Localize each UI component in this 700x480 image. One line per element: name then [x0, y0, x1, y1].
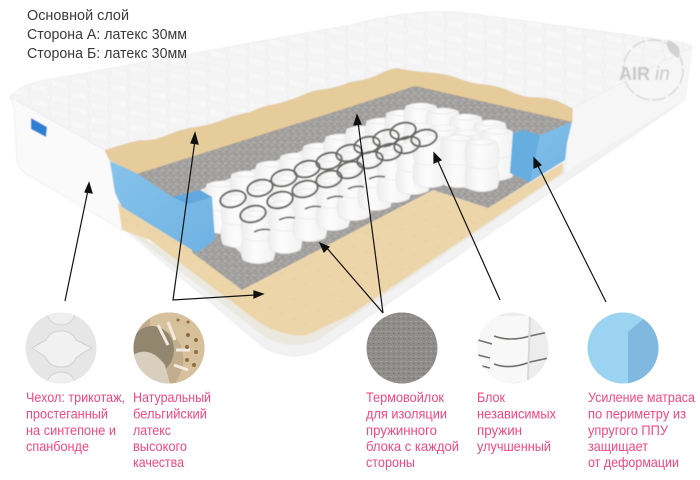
- icon: latex sample: [130, 312, 205, 384]
- grey thermal felt: [137, 86, 572, 290]
- arrow: blue foam: [534, 158, 606, 302]
- icon: quilted fabric: [25, 312, 97, 384]
- arrows: latex: [173, 133, 263, 300]
- quilted top of cover: [10, 12, 692, 150]
- left side of cover: [10, 97, 122, 230]
- text: thermal felt: для изоляции: [366, 406, 447, 422]
- right side of cover: [564, 47, 692, 174]
- text: foam reinforcement: [588, 389, 695, 470]
- watermark logo: in: [655, 64, 670, 85]
- panel: springs: [477, 312, 556, 454]
- text: foam reinforcement: по периметру из: [588, 406, 686, 422]
- quilted lower band: [122, 165, 566, 345]
- text: latex: Натуральный: [133, 389, 211, 405]
- text: foam reinforcement: защищает: [588, 438, 649, 454]
- text: springs: пружин: [477, 422, 522, 438]
- panel: thermal felt: [366, 312, 459, 470]
- arrow: springs: [434, 153, 500, 300]
- pocket springs block: [200, 103, 514, 264]
- text: foam reinforcement: от деформации: [588, 454, 679, 470]
- heading text: Сторона А: латекс 30мм: [27, 27, 187, 43]
- heading text: [27, 8, 187, 62]
- heading text: Основной слой: [27, 8, 129, 24]
- text: thermal felt: стороны: [366, 454, 415, 470]
- watermark logo: [619, 40, 683, 100]
- text: springs: независимых: [477, 406, 556, 422]
- text: springs: улучшенный: [477, 438, 551, 454]
- upper latex wall: [105, 68, 572, 174]
- icon: foam sample: [587, 312, 660, 384]
- mattress bottom cover band: [120, 100, 685, 356]
- text: latex: качества: [133, 454, 184, 470]
- brand tag: [31, 118, 47, 137]
- text: thermal felt: Термовойлок: [366, 389, 445, 405]
- text: cover: на синтепоне и: [26, 422, 116, 438]
- text: springs: [477, 389, 556, 454]
- text: latex: высокого: [133, 438, 187, 454]
- text: springs: Блок: [477, 389, 506, 405]
- arrows: thermal felt: [320, 115, 383, 313]
- mattress illustration: [10, 12, 692, 356]
- bottom latex layer: [118, 163, 563, 336]
- panel: cover: [25, 312, 125, 454]
- panel: latex: [130, 312, 211, 470]
- text: cover: простеганный: [26, 406, 108, 422]
- text: cover: спанбонде: [26, 438, 89, 454]
- icon: spring pockets: [477, 312, 549, 384]
- text: latex: латекс: [133, 422, 171, 438]
- text: latex: бельгийский: [133, 406, 207, 422]
- text: thermal felt: пружинного: [366, 422, 437, 438]
- text: latex: [133, 389, 211, 470]
- text: cover: Чехол: трикотаж,: [26, 389, 125, 405]
- arrow: cover: [65, 183, 92, 301]
- blue foam right: [510, 122, 572, 182]
- spring coils: [218, 120, 439, 232]
- text: thermal felt: блока с каждой: [366, 438, 459, 454]
- text: cover: [26, 389, 125, 454]
- icon: felt sample: [366, 312, 438, 384]
- watermark logo: AIR: [619, 64, 650, 84]
- text: thermal felt: [366, 389, 459, 470]
- panel: foam reinforcement: [587, 312, 695, 470]
- text: foam reinforcement: упругого ППУ: [588, 422, 668, 438]
- blue foam left: [110, 161, 215, 253]
- heading text: Сторона Б: латекс 30мм: [27, 46, 187, 62]
